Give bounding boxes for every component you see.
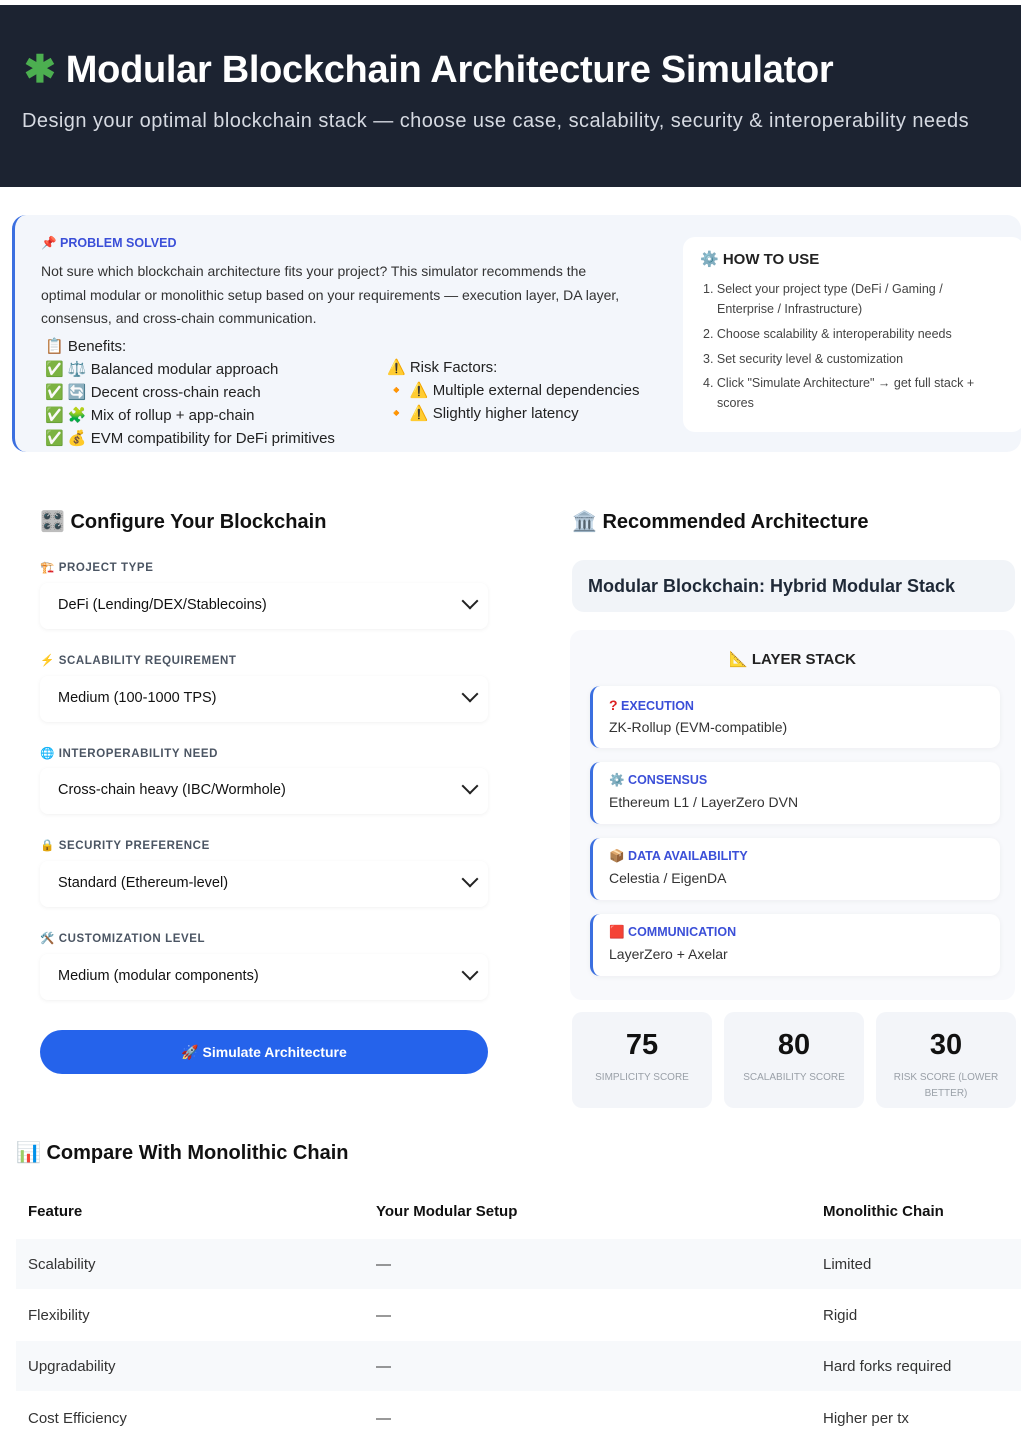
list: benefits: ✅ 🧩 Mix of rollup + app-chain — [45, 407, 255, 424]
card: how to use: ⚙️ HOW TO USE — [700, 251, 819, 268]
field: customization: 🛠️ CUSTOMIZATION LEVEL — [40, 933, 205, 945]
layer: communication: 🟥 COMMUNICATION — [609, 925, 736, 939]
score: risk: RISK SCORE (LOWER BETTER) — [894, 1072, 998, 1099]
list: risk factors: 🔸 ⚠️ Slightly higher latency — [387, 405, 579, 422]
table: comparison: Flexibility — [28, 1307, 90, 1324]
score: simplicity: 75 — [626, 1029, 658, 1061]
score: scalability: SCALABILITY SCORE — [743, 1072, 845, 1083]
score: simplicity — [572, 1012, 712, 1108]
layer: execution — [590, 686, 1000, 748]
layer: consensus — [590, 762, 1000, 824]
layer: communication: LayerZero + Axelar — [609, 946, 728, 962]
table: comparison: Higher per tx — [823, 1410, 909, 1427]
field: security: 🔒 SECURITY PREFERENCE — [40, 840, 210, 852]
card: architecture name — [572, 560, 1015, 612]
list: benefits: ✅ ⚖️ Balanced modular approach — [45, 361, 278, 378]
score: simplicity: SIMPLICITY SCORE — [595, 1072, 689, 1083]
heading: problem solved: 📌 PROBLEM SOLVED — [41, 236, 176, 250]
layer: data availability — [590, 838, 1000, 900]
layer: consensus: ⚙️ CONSENSUS — [609, 773, 707, 787]
table: comparison: Limited — [823, 1256, 871, 1273]
list: benefits: ✅ 🔄 Decent cross-chain reach — [45, 384, 261, 401]
heading: configure: 🎛️ Configure Your Blockchain — [40, 511, 326, 533]
title: ✱ Modular Blockchain Architecture Simulator — [24, 49, 833, 91]
table: comparison: Monolithic Chain — [823, 1203, 944, 1220]
text: description: Not sure which blockchain architecture fits your project? This simulator recommends the optimal modular or monolithic setup based on your requirements — execution layer, DA layer, consensus, and cross-chain communication. — [41, 263, 619, 326]
list: benefits: ✅ 💰 EVM compatibility for DeFi primitives — [45, 430, 335, 447]
card: how to use: 1. Select your project type (DeFi / Gaming / Enterprise / Infrastructure) 2. Choose scalability & interoperability needs 3. Set security level & customization 4. Click "Simulate Architecture" → get full stack + scores — [703, 282, 974, 410]
card: how to use — [683, 237, 1021, 432]
field: scalability: ⚡ SCALABILITY REQUIREMENT — [40, 655, 237, 667]
layer: data availability: Celestia / EigenDA — [609, 870, 727, 886]
table: comparison: — — [376, 1410, 391, 1427]
text: DeFi (Lending/DEX/Stablecoins) — [58, 597, 267, 613]
layer: execution: ZK-Rollup (EVM-compatible) — [609, 719, 787, 735]
text: Medium (100-1000 TPS) — [58, 690, 217, 706]
layer: data availability: 📦 DATA AVAILABILITY — [609, 849, 748, 863]
field: interoperability: 🌐 INTEROPERABILITY NEED — [40, 748, 218, 760]
heading: recommended: 🏛️ Recommended Architecture — [572, 511, 868, 533]
table: comparison — [28, 1203, 951, 1427]
list: risk factors — [387, 358, 640, 422]
field: project type: 🏗️ PROJECT TYPE — [40, 562, 153, 574]
list: benefits — [45, 338, 335, 447]
layer: communication — [590, 914, 1000, 976]
table: comparison: — — [376, 1307, 391, 1324]
table: comparison: Rigid — [823, 1307, 857, 1324]
list: benefits: 📋 Benefits: — [45, 338, 126, 355]
header — [0, 5, 1021, 187]
table: comparison: — — [376, 1358, 391, 1375]
score: risk: 30 — [930, 1029, 962, 1061]
subtitle: Design your optimal blockchain stack — choose use case, scalability, security & interoperability needs — [22, 110, 969, 132]
table: comparison: Feature — [28, 1203, 82, 1220]
card: architecture name: Modular Blockchain: Hybrid Modular Stack — [588, 576, 955, 596]
button: simulate — [40, 1030, 488, 1074]
table: comparison: Cost Efficiency — [28, 1410, 127, 1427]
layer: consensus: Ethereum L1 / LayerZero DVN — [609, 794, 798, 810]
text: Standard (Ethereum-level) — [58, 875, 228, 891]
heading: compare: 📊 Compare With Monolithic Chain — [16, 1142, 348, 1164]
table: comparison: Hard forks required — [823, 1358, 951, 1375]
text: Cross-chain heavy (IBC/Wormhole) — [58, 782, 286, 798]
layer: execution: ? EXECUTION — [609, 697, 694, 713]
panel: layer stack — [570, 630, 1015, 1000]
text: Medium (modular components) — [58, 968, 259, 984]
table: comparison: Upgradability — [28, 1358, 116, 1375]
score: scalability: 80 — [778, 1029, 810, 1061]
table: comparison: Your Modular Setup — [376, 1203, 517, 1220]
table: comparison: Scalability — [28, 1256, 96, 1273]
score: scalability — [724, 1012, 864, 1108]
panel: layer stack: 📐 LAYER STACK — [729, 651, 856, 668]
button: simulate: 🚀 Simulate Architecture — [181, 1044, 347, 1060]
panel: problem solved — [12, 215, 1021, 452]
list: risk factors: 🔸 ⚠️ Multiple external dependencies — [387, 382, 640, 399]
list: risk factors: ⚠️ Risk Factors: — [387, 359, 497, 376]
table: comparison: — — [376, 1256, 391, 1273]
score: risk — [876, 1012, 1016, 1108]
